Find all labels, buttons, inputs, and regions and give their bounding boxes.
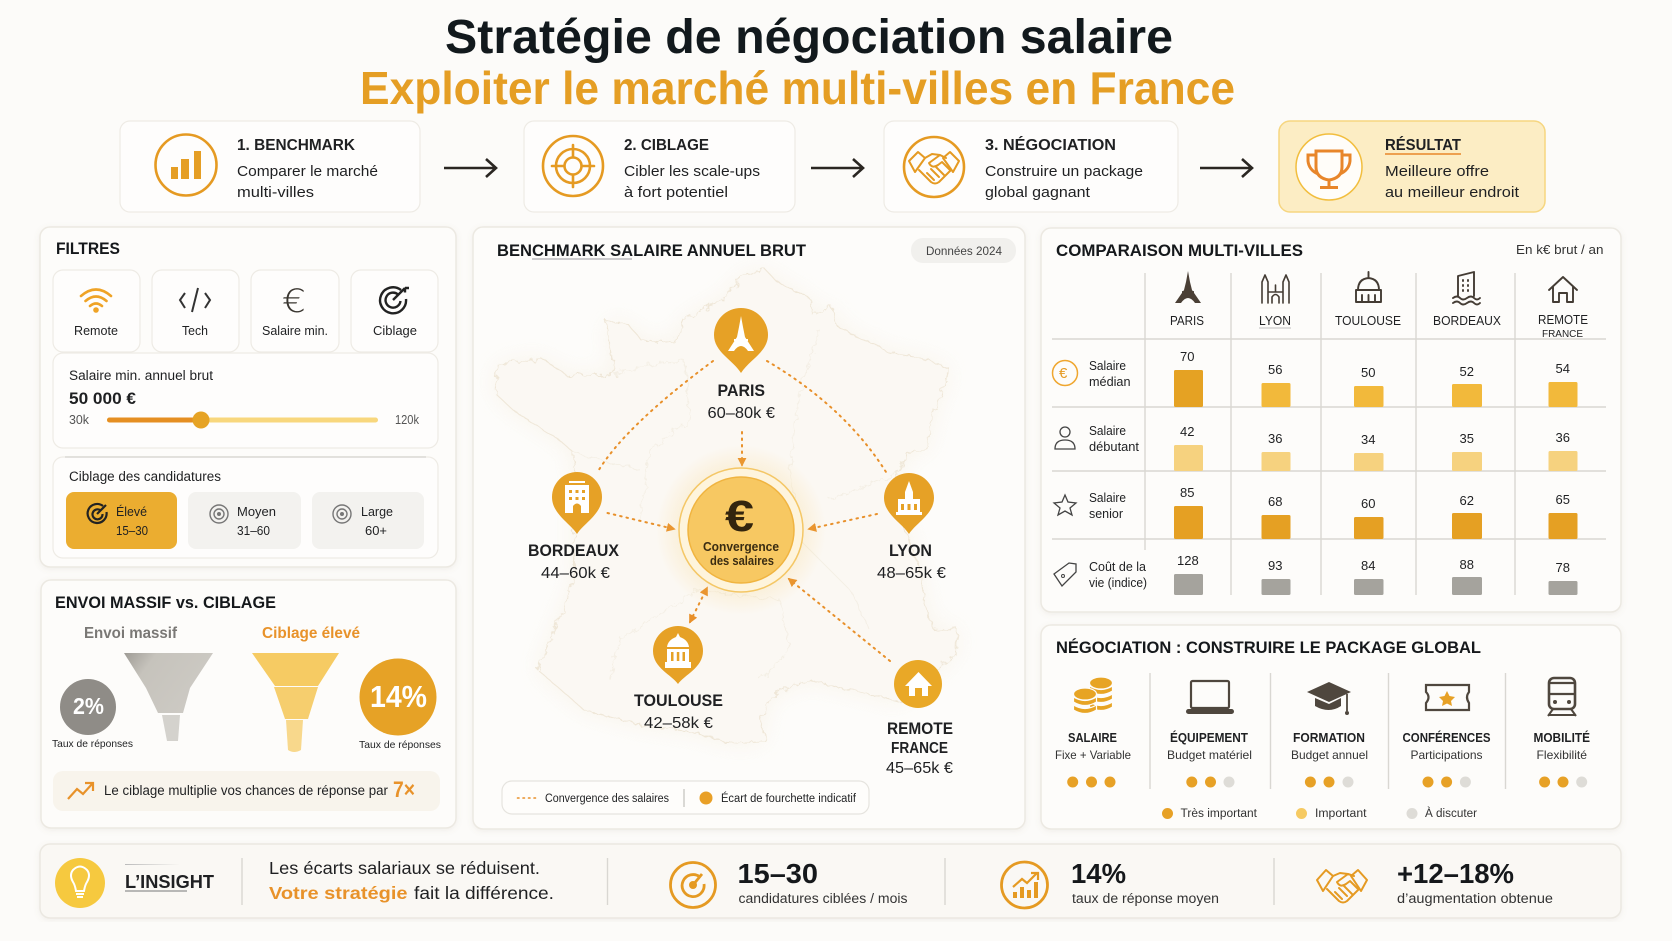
step: 3. Négociation: global gagnant	[985, 184, 1091, 201]
row: salaire senior: Salaire	[1089, 491, 1126, 505]
button: moyen: Moyen	[237, 504, 276, 519]
slider card	[53, 353, 438, 448]
pin: Paris	[708, 308, 775, 422]
label: l'insight: L’INSIGHT	[125, 872, 214, 892]
stat: 14%	[1002, 858, 1219, 908]
14% circle: 14%	[370, 679, 427, 714]
row: salaire médian: Salaire	[1089, 359, 1126, 373]
pin: Toulouse: 42–58k €	[644, 715, 713, 732]
column: Paris	[1170, 271, 1204, 328]
item: formation: Budget annuel	[1291, 748, 1368, 762]
row: salaire débutant: Salaire	[1089, 424, 1126, 438]
arrow: step 3 to result	[1200, 159, 1252, 177]
panel: benchmark map	[473, 227, 1025, 829]
2% circle: 2%	[73, 693, 104, 719]
step: Résultat	[1279, 121, 1545, 212]
row: salaire senior: 68	[1268, 494, 1282, 509]
item: équipement	[1167, 681, 1252, 788]
row: salaire débutant: 34	[1361, 432, 1375, 447]
button: large	[312, 492, 424, 549]
filter: tech	[152, 270, 239, 352]
step: Résultat: au meilleur endroit	[1385, 184, 1520, 201]
2% circle: Taux de réponses	[52, 738, 133, 750]
stat: 14%: 14%	[1071, 858, 1126, 889]
button: large: 60+	[365, 523, 387, 538]
row: coût de la vie: 128	[1177, 553, 1199, 568]
step: 3. Négociation	[884, 121, 1178, 212]
item: équipement: Budget matériel	[1167, 748, 1252, 762]
button: élevé	[66, 492, 177, 549]
step: 1. Benchmark: 1. BENCHMARK	[237, 137, 355, 154]
badge: données 2024: Données 2024	[926, 244, 1002, 258]
step: 3. Négociation: Construire un package	[985, 163, 1143, 180]
pin: Lyon: 48–65k €	[877, 565, 946, 582]
column: Remote France: REMOTE	[1538, 313, 1588, 327]
pin: Toulouse: TOULOUSE	[634, 691, 723, 710]
callout: 7x: Le ciblage multiplie vos chances de réponse par	[104, 783, 388, 798]
row: salaire médian: 52	[1460, 364, 1474, 379]
slider card: 120k	[395, 413, 420, 427]
ciblage card: Ciblage des candidatures	[69, 469, 221, 484]
gray funnel: Envoi massif	[84, 625, 178, 642]
insight text	[269, 858, 554, 903]
pin: Bordeaux	[528, 472, 620, 582]
row: coût de la vie: vie (indice)	[1089, 576, 1147, 590]
item: formation: FORMATION	[1293, 731, 1365, 745]
item: mobilité: MOBILITÉ	[1534, 730, 1590, 745]
unit note: En k€ brut / an	[1516, 242, 1604, 257]
map legend	[502, 781, 869, 814]
panel: comparaison multi-villes	[1041, 228, 1621, 612]
button: élevé: Élevé	[116, 504, 147, 519]
map of France	[495, 269, 957, 743]
row: salaire médian: 54	[1556, 361, 1570, 376]
row: salaire débutant: 36	[1268, 431, 1282, 446]
filter: tech: Tech	[182, 323, 208, 338]
pin: Bordeaux: BORDEAUX	[528, 541, 620, 560]
heading: comparaison: COMPARAISON MULTI-VILLES	[1056, 241, 1303, 260]
column: Toulouse: TOULOUSE	[1335, 314, 1401, 328]
pin: Remote France: REMOTE	[887, 719, 953, 738]
step: Résultat: Meilleure offre	[1385, 163, 1489, 180]
filter: salaire min: €	[282, 282, 306, 320]
step: 1. Benchmark: multi-villes	[237, 184, 314, 201]
center: convergence des salaires	[656, 445, 826, 615]
stat: +12–18%: d’augmentation obtenue	[1397, 891, 1553, 906]
row: salaire senior	[1054, 485, 1578, 539]
row: salaire débutant: 35	[1460, 431, 1474, 446]
stat: 15–30	[670, 858, 908, 908]
row: salaire médian: 50	[1361, 365, 1375, 380]
row: salaire médian: médian	[1089, 375, 1131, 389]
row: salaire débutant	[1055, 424, 1578, 471]
slider card: 50 000 €	[69, 390, 136, 408]
pin: Remote France: 45–65k €	[886, 760, 953, 777]
row: salaire débutant: débutant	[1089, 440, 1140, 454]
center: convergence des salaires: Convergence	[703, 540, 779, 554]
filter: ciblage	[351, 270, 438, 352]
item: équipement: ÉQUIPEMENT	[1170, 730, 1248, 745]
ciblage card	[53, 457, 438, 558]
column: Bordeaux: BORDEAUX	[1433, 314, 1502, 328]
button: large: Large	[361, 504, 393, 519]
row: salaire médian	[1052, 349, 1578, 407]
step: 2. Ciblage: à fort potentiel	[624, 184, 728, 201]
stat: +12–18%	[1317, 858, 1553, 906]
callout: 7x	[53, 771, 440, 811]
row: salaire médian: €	[1059, 365, 1068, 382]
14% circle	[359, 658, 441, 751]
slider card: Salaire min. annuel brut	[69, 368, 213, 383]
importance legend	[1162, 807, 1477, 820]
item: salaire: Fixe + Variable	[1055, 748, 1131, 762]
center: convergence des salaires: des salaires	[710, 554, 774, 568]
row: salaire senior: 65	[1556, 492, 1570, 507]
row: coût de la vie: 93	[1268, 558, 1282, 573]
convergence arrows	[597, 361, 890, 661]
pin: Remote France	[886, 660, 953, 777]
filter: remote: Remote	[74, 323, 118, 338]
step: 2. Ciblage	[524, 121, 795, 212]
row: salaire débutant: 42	[1180, 424, 1194, 439]
step: 2. Ciblage: Cibler les scale-ups	[624, 163, 760, 180]
heading: négociation: NÉGOCIATION : CONSTRUIRE LE PACKAGE GLOBAL	[1056, 638, 1481, 657]
row: salaire débutant: 36	[1556, 430, 1570, 445]
filter: salaire min: Salaire min.	[262, 323, 328, 338]
yellow funnel	[252, 625, 360, 752]
step: 3. Négociation: 3. NÉGOCIATION	[985, 135, 1116, 154]
heading: benchmark: BENCHMARK SALAIRE ANNUEL BRUT	[497, 241, 807, 260]
item: mobilité: Flexibilité	[1536, 748, 1587, 762]
row: salaire senior: 60	[1361, 496, 1375, 511]
slider card: 30k	[69, 413, 90, 427]
panel: négociation package	[1041, 625, 1621, 829]
row: coût de la vie: 78	[1556, 560, 1570, 575]
filter: salaire min	[251, 270, 339, 352]
filter: remote	[53, 270, 140, 352]
pin: Paris: PARIS	[718, 381, 765, 400]
14% circle: Taux de réponses	[359, 739, 441, 751]
column: Remote France: FRANCE	[1542, 328, 1583, 340]
column: Toulouse	[1335, 272, 1401, 328]
yellow funnel: Ciblage élevé	[262, 625, 360, 642]
callout: 7x: 7×	[393, 777, 415, 802]
pin: Toulouse	[634, 626, 723, 732]
step: 2. Ciblage: 2. CIBLAGE	[624, 137, 709, 154]
row: salaire senior: 85	[1180, 485, 1194, 500]
row: coût de la vie	[1054, 553, 1578, 595]
item: conférences	[1402, 685, 1490, 788]
item: salaire: SALAIRE	[1068, 731, 1117, 745]
stat: 14%: taux de réponse moyen	[1072, 891, 1219, 906]
insight bar	[40, 844, 1621, 918]
item: conférences: Participations	[1410, 748, 1482, 762]
insight text: Votre stratégie	[269, 883, 408, 903]
step: 1. Benchmark	[120, 121, 420, 212]
step: 1. Benchmark: Comparer le marché	[237, 163, 378, 180]
stat: 15–30: candidatures ciblées / mois	[738, 891, 908, 906]
column: Lyon	[1259, 275, 1291, 328]
row: salaire senior: senior	[1089, 507, 1123, 521]
column: Lyon: LYON	[1259, 314, 1291, 328]
heading: envoi massif: ENVOI MASSIF vs. CIBLAGE	[55, 593, 276, 612]
pin: Lyon: LYON	[889, 541, 932, 560]
row: coût de la vie: 88	[1460, 557, 1474, 572]
item: mobilité	[1534, 678, 1590, 788]
arrow: step 1 to 2	[444, 159, 496, 177]
badge: données 2024	[911, 238, 1016, 263]
item: formation	[1291, 682, 1368, 788]
heading: filtres: FILTRES	[56, 239, 120, 258]
row: salaire médian: 70	[1180, 349, 1194, 364]
column: Remote France	[1538, 277, 1588, 340]
insight text: fait la différence.	[414, 883, 554, 903]
title	[360, 11, 1235, 114]
map legend: Écart de fourchette indicatif	[721, 792, 857, 805]
stat: +12–18%: +12–18%	[1397, 858, 1514, 889]
button: élevé: 15–30	[116, 523, 148, 538]
2% circle	[52, 679, 133, 750]
arrow: step 2 to 3	[811, 159, 863, 177]
panel: envoi massif vs ciblage	[41, 580, 456, 828]
row: salaire senior: 62	[1460, 493, 1474, 508]
row: salaire médian: 56	[1268, 362, 1282, 377]
panel: filtres	[40, 227, 456, 567]
pin: Bordeaux: 44–60k €	[541, 565, 610, 582]
title: Stratégie de négociation salaire	[445, 11, 1173, 64]
row: coût de la vie: Coût de la	[1089, 560, 1146, 574]
step: Résultat: RÉSULTAT	[1385, 135, 1461, 154]
button: moyen: 31–60	[237, 523, 270, 538]
button: moyen	[188, 492, 301, 549]
icon: light bulb	[55, 858, 105, 908]
gray funnel	[84, 625, 213, 741]
pin: Remote France: FRANCE	[891, 740, 948, 757]
column: Bordeaux	[1433, 272, 1502, 328]
pin: Lyon	[877, 473, 946, 582]
center: convergence des salaires: €	[725, 492, 754, 541]
importance legend: À discuter	[1425, 807, 1477, 820]
item: conférences: CONFÉRENCES	[1402, 730, 1490, 745]
importance legend: Très important	[1180, 808, 1258, 820]
title: Exploiter le marché multi-villes en France	[360, 62, 1235, 114]
item: salaire	[1055, 677, 1131, 788]
row: coût de la vie: 84	[1361, 558, 1375, 573]
importance legend: Important	[1315, 808, 1367, 820]
map legend: Convergence des salaires	[545, 793, 669, 805]
stat: 15–30: 15–30	[738, 858, 818, 889]
filter: ciblage: Ciblage	[373, 323, 417, 338]
pin: Paris: 60–80k €	[708, 405, 775, 422]
insight text: Les écarts salariaux se réduisent.	[269, 858, 540, 878]
column: Paris: PARIS	[1170, 314, 1204, 328]
